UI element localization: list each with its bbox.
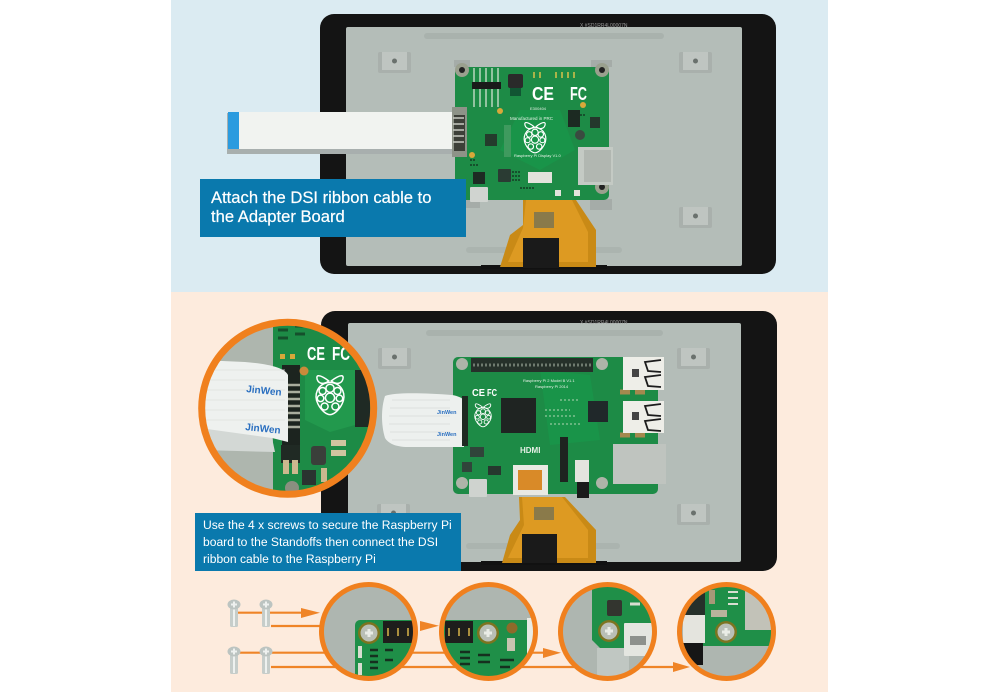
arrows from screws to mounting points — [238, 608, 690, 672]
icon: screws — [228, 600, 272, 674]
adapter board: CE — [532, 84, 554, 104]
Raspberry Pi board: Raspberry Pi 2014 — [535, 384, 569, 389]
ribbon cable — [382, 393, 468, 447]
DSI connector — [452, 107, 467, 157]
caption: step 1: Attach the DSI ribbon cable to — [211, 188, 431, 207]
magnified view: standoff four — [677, 582, 780, 678]
caption: step 1 — [200, 179, 466, 237]
magnified view: ribbon in Pi connector: FC — [332, 344, 350, 364]
magnified view: standoff one — [319, 582, 418, 681]
magnified view: standoff three — [560, 580, 660, 678]
caption: step 2: ribbon cable to the Raspberry Pi — [203, 552, 376, 566]
caption: step 2: Use the 4 x screws to secure the Raspberry Pi — [203, 518, 452, 532]
magnified view: ribbon in Pi connector: JinWen — [245, 422, 281, 437]
flex cable — [502, 497, 596, 563]
magnified view: ribbon in Pi connector: JinWen — [246, 384, 282, 399]
caption: step 1: the Adapter Board — [211, 207, 345, 226]
infographic — [171, 0, 828, 692]
touchscreen rear, step 1 — [227, 14, 776, 274]
Raspberry Pi board: HDMI — [520, 446, 540, 455]
caption: step 2 — [195, 513, 461, 571]
magnified view: ribbon in Pi connector: CE — [307, 344, 325, 364]
magnified view: ribbon in Pi connector — [200, 319, 383, 499]
caption: step 2: board to the Standoffs then connect the DSI — [203, 535, 438, 549]
Raspberry Pi board: CE — [472, 388, 485, 399]
adapter board — [455, 63, 613, 202]
adapter board: Raspberry Pi Display V1.0 — [514, 153, 561, 158]
adapter board: FC — [570, 84, 587, 104]
touchscreen rear, step 1: X #SD1RR4L00007N — [580, 23, 628, 29]
Raspberry Pi board — [453, 357, 666, 498]
ribbon cable — [227, 112, 455, 154]
adapter board: Manufactured in PRC — [510, 116, 554, 121]
Raspberry Pi board: FC — [487, 388, 497, 399]
panel: step 1 background — [171, 0, 828, 292]
touchscreen with Raspberry Pi, step 2 — [321, 311, 777, 571]
Raspberry Pi board: Raspberry Pi 2 Model B V1.1 — [523, 378, 575, 383]
touchscreen with Raspberry Pi, step 2: X #SD1RR4L00007N — [580, 320, 628, 326]
ribbon cable: JinWen — [437, 410, 457, 416]
flex cable — [500, 200, 596, 268]
adapter board: E300404 — [530, 106, 547, 111]
panel: step 2 background — [171, 292, 828, 692]
magnified view: standoff two — [436, 584, 536, 690]
ribbon cable: JinWen — [437, 432, 457, 438]
